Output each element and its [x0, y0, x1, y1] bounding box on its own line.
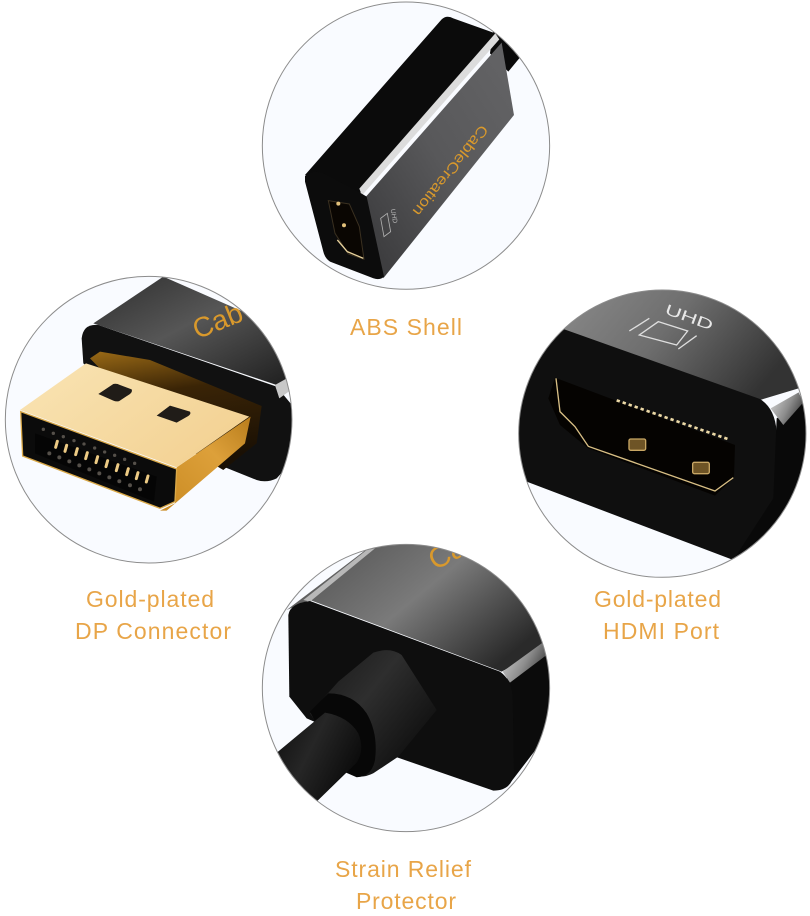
UHD icon — [381, 213, 391, 237]
housing front — [82, 325, 293, 481]
left edge highlight — [303, 548, 375, 602]
gold plug side — [160, 417, 251, 511]
label: Gold-plated DP Connector: DP Connector — [75, 618, 231, 644]
plug front — [21, 412, 177, 508]
label: Gold-plated HDMI Port: HDMI Port — [603, 618, 720, 644]
inner cavity — [35, 433, 157, 502]
gold outline — [556, 378, 733, 491]
label: Strain Relief Protector: Protector — [356, 888, 456, 914]
label: Gold-plated HDMI Port: Gold-plated — [594, 586, 721, 612]
front face — [305, 172, 384, 279]
silver stripe — [359, 33, 499, 195]
silver stripe — [275, 379, 289, 398]
UHD mark: UHD — [663, 302, 715, 334]
panel: ABS shell circle — [262, 2, 550, 289]
strain relief — [310, 650, 437, 777]
port — [328, 201, 364, 259]
contact pins — [56, 441, 148, 482]
brand text fragment: Cab — [188, 297, 247, 345]
connector housing top — [93, 277, 300, 385]
panel: strain relief protector circle — [260, 530, 553, 833]
top face — [305, 17, 500, 193]
label: Strain Relief Protector: Strain Relief — [335, 856, 472, 882]
label: Gold-plated DP Connector: Gold-plated — [86, 586, 214, 612]
front face — [288, 601, 514, 791]
latch holes — [98, 384, 132, 401]
grey top face — [564, 290, 798, 400]
relief collar — [310, 693, 376, 777]
cable — [260, 713, 361, 833]
label: ABS Shell: ABS Shell — [350, 314, 462, 340]
brand text: CableCreation — [409, 121, 491, 219]
contact pin row — [617, 400, 729, 439]
port opening — [548, 378, 735, 496]
lower contacts — [42, 428, 142, 491]
label: Gold-plated HDMI Port — [594, 586, 721, 644]
label: Strain Relief Protector — [335, 856, 472, 914]
gold plug back shadow — [90, 352, 262, 470]
gold plug top — [20, 363, 249, 467]
grey side face — [366, 43, 514, 278]
grey top face — [287, 540, 553, 672]
UHD small text: UHD — [389, 208, 398, 224]
label: Gold-plated DP Connector — [75, 586, 231, 644]
brand fragment: Ca — [423, 530, 472, 577]
silver stripe — [503, 643, 547, 683]
port pads — [629, 439, 646, 450]
panel: gold-plated DP connector circle — [5, 276, 300, 563]
silver stripe — [771, 392, 803, 425]
cable stub — [490, 32, 520, 72]
black body — [513, 329, 778, 560]
panel: gold-plated HDMI port circle — [513, 282, 810, 577]
right side — [506, 656, 550, 782]
right side — [736, 404, 806, 557]
